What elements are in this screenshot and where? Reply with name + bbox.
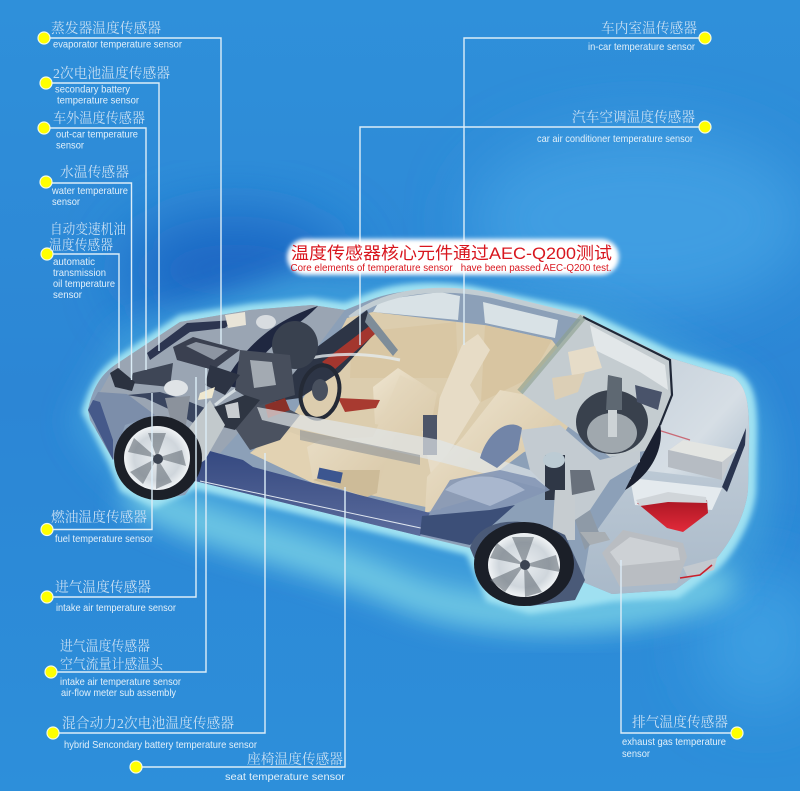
label: fuel: 燃油温度传感器	[51, 509, 147, 526]
trunk lid	[640, 360, 748, 480]
label: fuel: fuel temperature sensor	[55, 533, 153, 545]
steering wheel	[296, 362, 344, 422]
label: intake air: intake air temperature sensor	[56, 602, 176, 614]
label: seat: seat temperature sensor	[225, 771, 346, 783]
near door panel	[195, 447, 430, 536]
label: hybrid battery: 混合动力2次电池温度传感器	[62, 715, 234, 732]
label: exhaust gas: sensor	[622, 748, 650, 760]
label: air-flow meter: air-flow meter sub assembly	[61, 687, 177, 699]
title banner: Core elements of temperature sensor have been passed AEC-Q200 test.	[290, 263, 612, 274]
car illustration	[88, 290, 749, 606]
interior beige	[250, 312, 590, 510]
rear wheel	[470, 522, 585, 606]
battery	[658, 430, 737, 480]
label: transmission oil: oil temperature	[53, 278, 115, 290]
front wheel	[114, 416, 202, 500]
label: transmission oil: sensor	[53, 289, 82, 301]
label: water: water temperature	[51, 185, 128, 197]
label: secondary battery: temperature sensor	[57, 94, 139, 106]
label: out-car: sensor	[56, 140, 84, 152]
hood band	[223, 306, 318, 388]
label: air-flow meter: 进气温度传感器	[60, 638, 150, 655]
label: in-car: 车内室温传感器	[601, 20, 697, 37]
label: secondary battery: 2次电池温度传感器	[53, 65, 170, 82]
label: out-car	[38, 110, 145, 152]
title banner	[287, 239, 619, 275]
label: transmission oil: automatic	[53, 256, 95, 268]
label: secondary battery: secondary battery	[55, 84, 131, 96]
label: water: 水温传感器	[60, 164, 129, 181]
label: in-car: in-car temperature sensor	[588, 41, 695, 53]
far windows	[373, 292, 558, 338]
front strut	[165, 396, 190, 425]
label: air-flow meter: 空气流量计感温头	[60, 656, 164, 673]
label: water: sensor	[52, 196, 80, 208]
label: transmission oil	[41, 221, 126, 301]
banner pill	[287, 239, 619, 275]
label: evaporator: evaporator temperature sensor	[53, 38, 182, 50]
label: car air conditioner: car air conditioner temperature sensor	[537, 133, 693, 145]
label: car air conditioner	[537, 109, 711, 145]
label: exhaust gas: 排气温度传感器	[632, 714, 728, 731]
label: transmission oil: 温度传感器	[49, 237, 113, 254]
label: seat	[130, 751, 346, 783]
label: in-car	[588, 20, 711, 53]
label: out-car: 车外温度传感器	[53, 110, 145, 127]
label: exhaust gas: exhaust gas temperature	[622, 736, 726, 748]
label: intake air: 进气温度传感器	[55, 579, 151, 596]
rear suspension frame	[520, 425, 640, 550]
dashboard	[265, 310, 398, 422]
label: car air conditioner: 汽车空调温度传感器	[572, 109, 695, 126]
label: transmission oil: transmission	[53, 267, 106, 279]
title banner: 温度传感器核心元件通过AEC-Q200测试	[291, 244, 612, 263]
front fender and bumper	[92, 392, 155, 460]
leader lines	[50, 38, 731, 767]
engine parts	[110, 312, 318, 470]
label: fuel	[41, 509, 153, 545]
label: air-flow meter	[45, 638, 181, 699]
roof rail	[350, 290, 585, 318]
engine bay background	[100, 305, 345, 470]
label: air-flow meter: intake air temperature sensor	[60, 676, 181, 688]
rear silver body	[583, 316, 749, 594]
label: hybrid battery: hybrid Sencondary battery temperature sensor	[64, 739, 257, 751]
label: evaporator	[38, 20, 182, 50]
translucent door bar	[257, 407, 548, 490]
car body silhouette	[88, 290, 749, 606]
label: hybrid battery	[47, 715, 257, 751]
label: seat: 座椅温度传感器	[247, 751, 343, 768]
rear seats	[423, 390, 562, 513]
label: intake air	[41, 579, 176, 614]
rear see-through compartment	[520, 317, 672, 490]
label: transmission oil: 自动变速机油	[50, 221, 126, 238]
label: secondary battery	[40, 65, 170, 106]
front seats	[307, 368, 440, 497]
rear near door	[420, 470, 550, 545]
label: water	[40, 164, 129, 208]
muffler	[580, 530, 717, 587]
label: exhaust gas	[622, 714, 743, 760]
footwell and firewall	[213, 395, 300, 450]
label: evaporator: 蒸发器温度传感器	[51, 20, 161, 37]
label: out-car: out-car temperature	[56, 128, 138, 140]
car glow halo	[70, 270, 776, 622]
tail light	[636, 492, 708, 532]
